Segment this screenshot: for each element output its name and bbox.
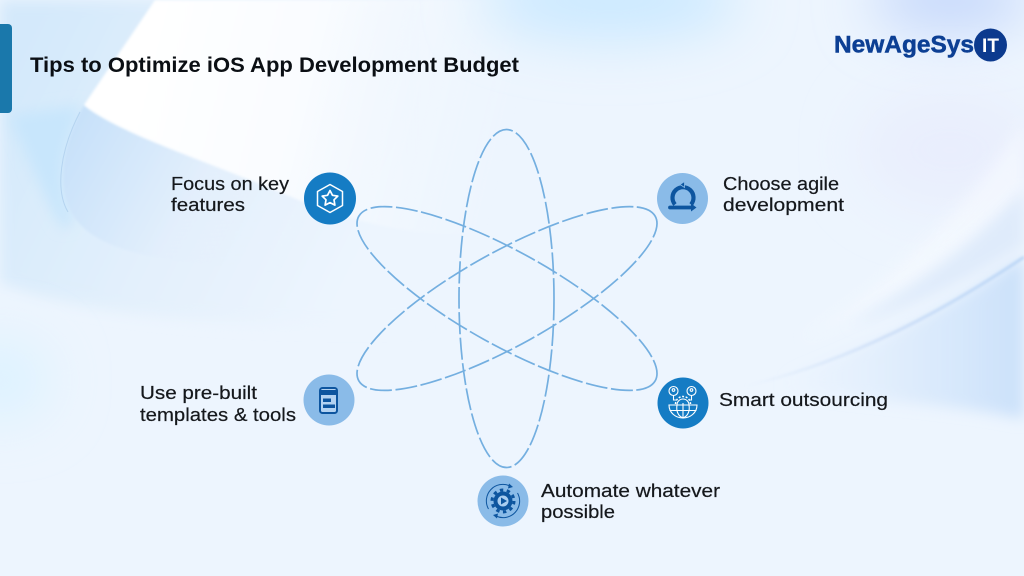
logo wordmark: NewAgeSys [834, 32, 974, 58]
label: Automate whatever [541, 481, 720, 501]
label: features [171, 195, 245, 215]
item: choose agile development [657, 173, 844, 224]
label: Use pre-built [140, 383, 257, 403]
label: development [723, 195, 844, 215]
label: templates & tools [140, 405, 296, 425]
icon: globe with people [658, 378, 708, 428]
item: use pre-built templates and tools [140, 374, 354, 426]
logo badge [974, 28, 1007, 62]
item: focus on key features [171, 172, 356, 224]
icon: agile loop [657, 173, 708, 224]
item: smart outsourcing [658, 378, 888, 428]
icon: template screen [304, 374, 354, 426]
logo badge: IT [982, 36, 999, 57]
item: automate whatever possible [478, 476, 720, 526]
accent bar [0, 24, 12, 113]
label: Focus on key [171, 174, 289, 194]
logo [834, 28, 1007, 62]
orbit diagram [336, 130, 678, 468]
label: Choose agile [723, 174, 839, 194]
label: possible [541, 502, 615, 522]
icon: star in hexagon [304, 172, 356, 224]
label: Smart outsourcing [719, 390, 888, 410]
title: Tips to Optimize iOS App Development Budget [30, 54, 519, 77]
icon: gear with play [478, 476, 528, 526]
